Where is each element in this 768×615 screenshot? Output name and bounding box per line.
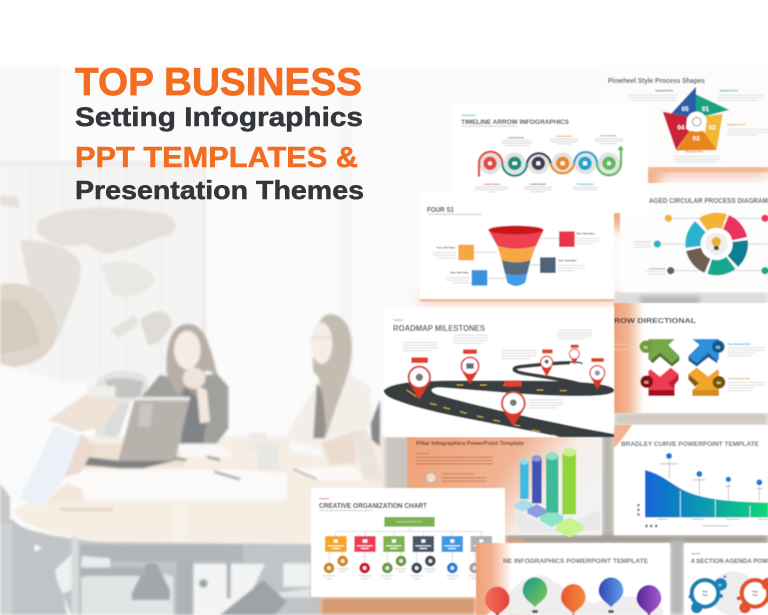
panel: four s1 funnel bbox=[420, 191, 614, 302]
title line: setting infographics: Setting Infographics bbox=[75, 102, 363, 132]
people, laptop, glasses bbox=[83, 314, 383, 480]
road with milestone pins bbox=[384, 318, 614, 437]
pinwheel diagram: Keyword Here bbox=[685, 150, 704, 154]
panel: pillar infographics bbox=[407, 437, 602, 537]
pinwheel diagram: Keyword Here bbox=[655, 89, 674, 93]
org chart heading: CREATIVE ORGANIZATION CHART bbox=[319, 503, 428, 510]
four directional arrows bbox=[640, 339, 765, 396]
timeline heading: TIMELINE ARROW INFOGRAPHICS bbox=[461, 119, 569, 126]
pinwheel diagram: Keyword Here bbox=[720, 89, 738, 93]
panel: arrow directional bbox=[614, 303, 768, 413]
left person shirt and hands bbox=[0, 367, 118, 507]
pinwheel diagram: 03 bbox=[693, 136, 700, 143]
table top bbox=[0, 437, 768, 615]
panel: pinwheel process shapes bbox=[601, 63, 768, 172]
circular process ring bbox=[633, 211, 768, 277]
woman one bbox=[142, 373, 228, 443]
chair back bbox=[95, 371, 148, 443]
title line: ppt templates: PPT TEMPLATES & bbox=[75, 142, 358, 174]
balloon heading: NE INFOGRAPHICS POWERPOINT TEMPLATE bbox=[503, 558, 648, 565]
pinwheel diagram: Keyword Here bbox=[727, 123, 746, 127]
laptop bbox=[118, 398, 190, 461]
panel: timeline arrow infographics bbox=[454, 105, 648, 213]
agenda circles: Your bbox=[752, 589, 758, 593]
timeline arrow chart: Infographics bbox=[462, 113, 477, 117]
funnel diagram: Your Text Here bbox=[576, 231, 595, 235]
funnel diagram bbox=[428, 214, 599, 286]
panel: creative organization chart bbox=[311, 488, 505, 597]
woman two bbox=[283, 373, 373, 463]
timeline arrow chart: Lorem ipsum bbox=[529, 182, 547, 186]
agenda circles: Your bbox=[702, 589, 708, 593]
panel: aged circular process diagram bbox=[620, 183, 768, 292]
pinwheel diagram bbox=[628, 87, 767, 162]
title bbox=[75, 61, 364, 205]
title line: presentation themes: Presentation Themes bbox=[75, 175, 364, 205]
agenda circles: Text bbox=[752, 593, 758, 597]
pinwheel diagram: 01 bbox=[702, 106, 710, 113]
funnel diagram: Your Text Here bbox=[450, 270, 469, 274]
panel: balloon infographics bbox=[476, 543, 670, 615]
timeline arrow chart bbox=[462, 113, 624, 192]
arrow directional heading: ROW DIRECTIONAL bbox=[614, 316, 697, 325]
agenda circles bbox=[688, 551, 768, 615]
agenda circles: 01 bbox=[718, 583, 722, 587]
four directional arrows: 04 bbox=[717, 381, 722, 385]
road with milestone pins: Timeline bbox=[393, 318, 404, 322]
agenda circles: Agenda bbox=[691, 551, 701, 555]
org chart diagram: Diagram bbox=[319, 496, 330, 500]
pillar chart bbox=[416, 448, 600, 537]
pinwheel heading: Pinwheel Style Process Shapes bbox=[608, 76, 705, 85]
funnel diagram: Your Text Here bbox=[437, 245, 456, 249]
pinwheel diagram: 02 bbox=[709, 124, 716, 131]
four directional arrows: 02 bbox=[716, 345, 720, 349]
timeline arrow chart: Lorem ipsum bbox=[507, 136, 525, 140]
funnel diagram: Your Text Here bbox=[558, 258, 577, 262]
bradley curve chart bbox=[637, 453, 768, 527]
timeline arrow chart: Lorem ipsum bbox=[483, 182, 501, 186]
right laptop and chair bbox=[371, 400, 380, 447]
four directional arrows: 01 bbox=[644, 345, 648, 349]
pillar heading: Pillar Infographics PowerPoint Template bbox=[416, 441, 525, 447]
pinwheel diagram: 05 bbox=[682, 106, 689, 113]
title line: top business: TOP BUSINESS bbox=[75, 61, 362, 104]
panel: roadmap milestones bbox=[384, 307, 614, 437]
four directional arrows: 03 bbox=[644, 380, 648, 384]
panel: bradley curve bbox=[614, 425, 768, 535]
left person hair bbox=[0, 283, 57, 367]
timeline arrow chart: Lorem ipsum bbox=[577, 182, 594, 186]
four directional arrows: Your Keyword Here bbox=[728, 343, 751, 346]
org chart diagram: Executive Administration bbox=[397, 521, 423, 524]
timeline arrow chart: Lorem ipsum bbox=[555, 134, 573, 138]
timeline arrow chart: Lorem ipsum bbox=[600, 134, 617, 138]
funnel heading: FOUR S1 bbox=[427, 205, 454, 214]
balloons bbox=[485, 575, 663, 615]
org chart diagram bbox=[319, 496, 494, 579]
papers and pens bbox=[178, 445, 233, 457]
pinwheel diagram: 04 bbox=[677, 124, 685, 131]
roadmap heading: ROADMAP MILESTONES bbox=[393, 324, 486, 333]
water glasses bbox=[248, 433, 267, 453]
four directional arrows: Your Keyword Here bbox=[728, 378, 751, 381]
orange glow behind panels bbox=[420, 130, 768, 302]
agenda circles: Text bbox=[702, 593, 708, 597]
under table floor bbox=[0, 520, 320, 615]
panel: 4 section agenda bbox=[684, 543, 768, 615]
bradley heading: BRADLEY CURVE POWERPOINT TEMPLATE bbox=[621, 441, 759, 448]
wall map board bbox=[0, 163, 205, 383]
